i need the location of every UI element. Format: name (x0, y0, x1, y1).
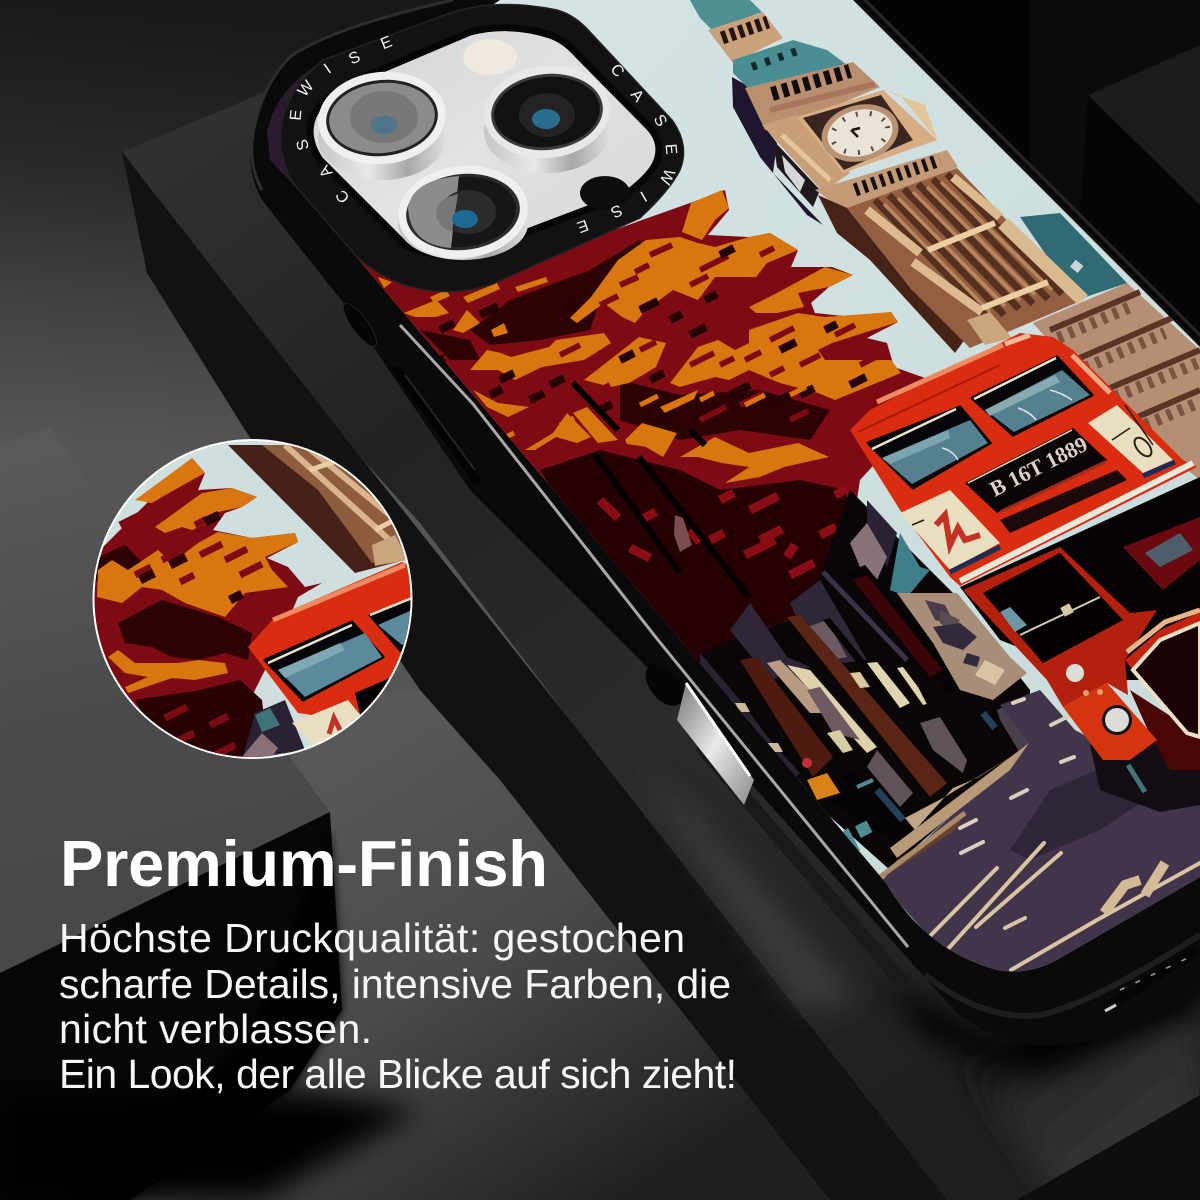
brand lettering: CASEWISE left arc: E (288, 109, 305, 121)
lower button hole (638, 657, 690, 713)
brand lettering: CASEWISE right arc: A (627, 86, 647, 106)
phone case body (250, 0, 1200, 1045)
red double-decker bus (850, 333, 1200, 812)
brand lettering: CASEWISE right arc: C (607, 61, 627, 81)
body copy: nicht verblassen. (59, 1006, 372, 1052)
lit floor (0, 690, 830, 1200)
road (876, 690, 1200, 985)
dark art sliver around camera island (267, 60, 352, 248)
upper deck (850, 333, 1197, 586)
right hand buildings (867, 500, 897, 567)
bottom port (1108, 952, 1194, 1007)
lens: top left (314, 66, 450, 180)
dark shadow strip along plinth (122, 152, 947, 1200)
body copy (59, 915, 737, 1097)
circle tree mass (90, 458, 322, 770)
road markings (929, 843, 1200, 970)
brand lettering: CASEWISE left arc (288, 34, 395, 206)
bus windows (868, 407, 990, 488)
circle sky (90, 438, 416, 760)
circle orange foliage (97, 458, 298, 693)
island ring (281, 4, 684, 291)
circle tower (228, 445, 405, 573)
autumn tree: crimson mass (340, 190, 925, 700)
cream advert panels (1088, 405, 1173, 473)
street buildings (700, 490, 1030, 870)
heading: Premium-Finish (60, 827, 548, 900)
lower-left block (0, 428, 330, 973)
camera glass (310, 28, 659, 255)
Big Ben clock tower (690, 0, 1083, 353)
brand lettering: CASEWISE right arc: W (655, 166, 678, 188)
circle pixel bricks (120, 515, 262, 755)
parliament building and teal tower (1020, 213, 1200, 480)
mute hole (338, 299, 382, 351)
volume slot (397, 370, 477, 480)
upper wall (0, 0, 700, 820)
contact shadow below phone (880, 960, 1200, 1075)
body copy: Ein Look, der alle Blicke auf sich zieht! (59, 1051, 737, 1097)
brand lettering: CASEWISE right arc: E (662, 143, 679, 155)
purple blocks (730, 603, 810, 680)
lower deck (960, 477, 1200, 680)
street base (700, 490, 1030, 870)
brand lettering: CASEWISE right arc (575, 61, 679, 235)
red double-decker bus: B 16T 1889 (986, 431, 1091, 502)
brand lettering: CASEWISE right arc: E (575, 216, 590, 235)
curb (890, 743, 1029, 858)
flash (463, 39, 517, 75)
cream facades (767, 660, 821, 713)
curb block (905, 756, 1012, 830)
right side darks (860, 0, 1200, 340)
metal side button (677, 683, 754, 805)
brand lettering: CASEWISE right arc: I (637, 187, 649, 204)
circle buildings (242, 700, 305, 760)
sky (357, 0, 1200, 972)
microphone hole (580, 176, 630, 210)
orange foliage (378, 190, 901, 483)
brand lettering: CASEWISE right arc: S (650, 112, 670, 130)
brand lettering: CASEWISE left arc: S (346, 48, 363, 68)
brand lettering: CASEWISE left arc: A (316, 162, 336, 180)
brand lettering: CASEWISE left arc: C (333, 186, 353, 206)
circle bus (248, 562, 412, 722)
bus stripes (950, 462, 1175, 572)
brand lettering: CASEWISE right arc: S (608, 201, 625, 221)
destination panel (965, 428, 1107, 513)
inset detail circle (90, 438, 416, 770)
dark tree shadows (470, 240, 660, 345)
glossy rim highlight (400, 325, 908, 947)
brand lettering: CASEWISE left arc: S (294, 137, 313, 152)
body copy: scharfe Details, intensive Farben, die (59, 961, 731, 1007)
brown stripes (787, 615, 947, 797)
brand lettering: CASEWISE left arc: E (378, 34, 395, 53)
brand lettering: CASEWISE left arc: I (321, 61, 335, 77)
side buttons and ports (338, 299, 1194, 1011)
soft highlight beside phone (640, 770, 860, 1010)
brand lettering: CASEWISE left arc: W (295, 77, 318, 100)
lens: top right (480, 60, 614, 173)
phone artwork: pixel London scene (357, 0, 1200, 972)
floor lower right (960, 1000, 1200, 1200)
bus front hood (1125, 612, 1200, 668)
body copy: Höchste Druckqualität: gestochen (59, 915, 685, 961)
shopfront details (807, 773, 840, 800)
circle tree shadows (118, 600, 252, 660)
crimson and dark pixel bricks (520, 245, 876, 450)
camera island (281, 4, 684, 291)
lens: bottom (394, 159, 532, 265)
